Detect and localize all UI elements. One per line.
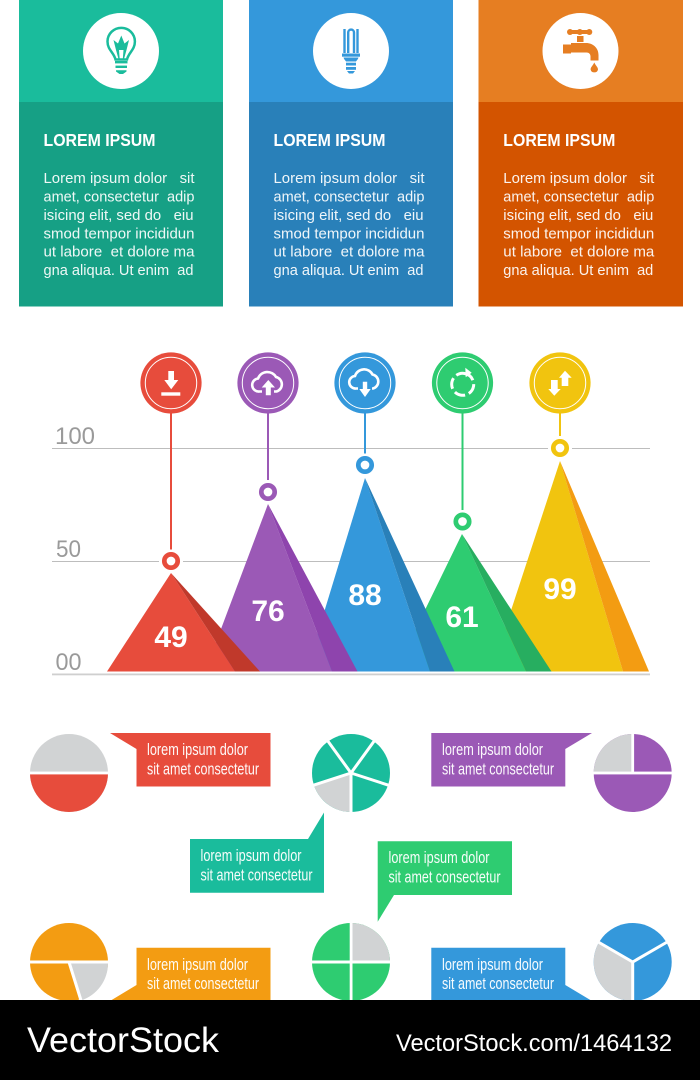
text block: blue card: isicing elit, sed do eiu: [274, 208, 424, 224]
text block: orange card: gna aliqua. Ut enim ad: [503, 263, 653, 279]
heading: blue card: LOREM IPSUM: [274, 130, 386, 150]
marker: blue cloud download: [334, 352, 396, 472]
callout: green: lorem ipsum dolor: [388, 849, 490, 867]
pie: purple three quarters: [591, 732, 674, 812]
text block: teal card: ut labore et dolore ma: [44, 244, 195, 260]
text block: orange card: smod tempor incididun: [503, 226, 654, 242]
marker: green refresh: [432, 352, 493, 528]
text block: blue card: smod tempor incididun: [274, 226, 424, 242]
callout: red: lorem ipsum dolor: [147, 741, 248, 759]
callout: teal: [190, 812, 324, 893]
icon: energy saving bulb: [342, 29, 360, 74]
bar: green triangle 61: [395, 534, 552, 672]
text block: orange card: [503, 171, 655, 279]
footer logo: VectorStock: [27, 1021, 220, 1060]
panel: orange card: [478, 0, 683, 306]
value labels: 88: [348, 579, 382, 612]
value labels: 99: [543, 573, 577, 606]
icon: download: [161, 371, 180, 396]
callout: blue: sit amet consectetur: [442, 975, 554, 993]
icon: refresh: [450, 368, 475, 397]
text block: blue card: ut labore et dolore ma: [274, 244, 425, 260]
text block: blue card: gna aliqua. Ut enim ad: [274, 263, 424, 279]
callout: red: [110, 733, 270, 786]
callout: purple: [431, 733, 592, 786]
text block: blue card: Lorem ipsum dolor sit: [274, 171, 424, 187]
callout: teal: lorem ipsum dolor: [200, 847, 302, 865]
footer url: VectorStock.com/1464132: [396, 1030, 672, 1057]
icon: cloud upload: [252, 372, 282, 395]
pie: orange: [28, 923, 110, 1002]
text block: blue card: [274, 171, 425, 279]
footer: watermark bar: [0, 1000, 700, 1080]
pie: blue thirds: [594, 923, 672, 1003]
callout: blue: lorem ipsum dolor: [442, 956, 543, 974]
axis labels: [55, 423, 95, 676]
icon: up and down arrows: [548, 371, 572, 396]
bar: purple triangle 76: [205, 504, 358, 672]
callout: orange: sit amet consectetur: [147, 975, 259, 993]
pie: red half: [28, 734, 110, 812]
callout: green: [378, 841, 512, 922]
text block: teal card: gna aliqua. Ut enim ad: [44, 263, 194, 279]
text block: teal card: amet, consectetur adip: [44, 190, 194, 206]
marker: red download: [140, 352, 202, 568]
bar: red triangle 49: [107, 573, 260, 672]
text block: orange card: Lorem ipsum dolor sit: [503, 171, 654, 187]
pie: green quarters: [310, 921, 392, 1003]
text block: orange card: amet, consectetur adip: [503, 190, 654, 206]
callout: orange: lorem ipsum dolor: [147, 956, 248, 974]
text block: orange card: isicing elit, sed do eiu: [503, 208, 653, 224]
callout: orange: [110, 948, 270, 1001]
value labels: 49: [154, 621, 188, 654]
text block: teal card: [44, 171, 195, 279]
icon: cloud download: [349, 369, 378, 397]
icon: water tap: [563, 29, 598, 72]
text block: teal card: isicing elit, sed do eiu: [44, 208, 194, 224]
callout: green: sit amet consectetur: [388, 868, 501, 886]
value labels: 61: [445, 601, 479, 634]
callout: purple: lorem ipsum dolor: [442, 741, 543, 759]
callout: red: sit amet consectetur: [147, 760, 259, 778]
bar: blue triangle 88: [306, 478, 454, 672]
pie: teal five segments: [312, 734, 390, 814]
marker: yellow transfer: [529, 352, 591, 455]
callout: purple: sit amet consectetur: [442, 760, 554, 778]
axis labels: 00: [56, 649, 82, 676]
callout: blue: [431, 948, 592, 1001]
value labels: [154, 573, 577, 654]
heading: orange card: LOREM IPSUM: [503, 130, 615, 150]
bar: yellow triangle 99: [491, 461, 649, 672]
text block: orange card: ut labore et dolore ma: [503, 244, 655, 260]
text block: blue card: amet, consectetur adip: [274, 190, 424, 206]
panel: blue card: [249, 0, 453, 306]
chart: triangle chart: [52, 352, 650, 676]
callout: teal: sit amet consectetur: [200, 866, 313, 884]
axis labels: 50: [56, 536, 81, 563]
value labels: 76: [251, 595, 285, 628]
icon: light bulb: [108, 28, 135, 74]
text block: teal card: Lorem ipsum dolor sit: [44, 171, 195, 187]
text block: teal card: smod tempor incididun: [44, 226, 194, 242]
axis labels: 100: [55, 423, 95, 450]
heading: teal card: LOREM IPSUM: [44, 130, 156, 150]
marker: purple upload: [237, 352, 299, 499]
panel: teal card: [19, 0, 223, 306]
